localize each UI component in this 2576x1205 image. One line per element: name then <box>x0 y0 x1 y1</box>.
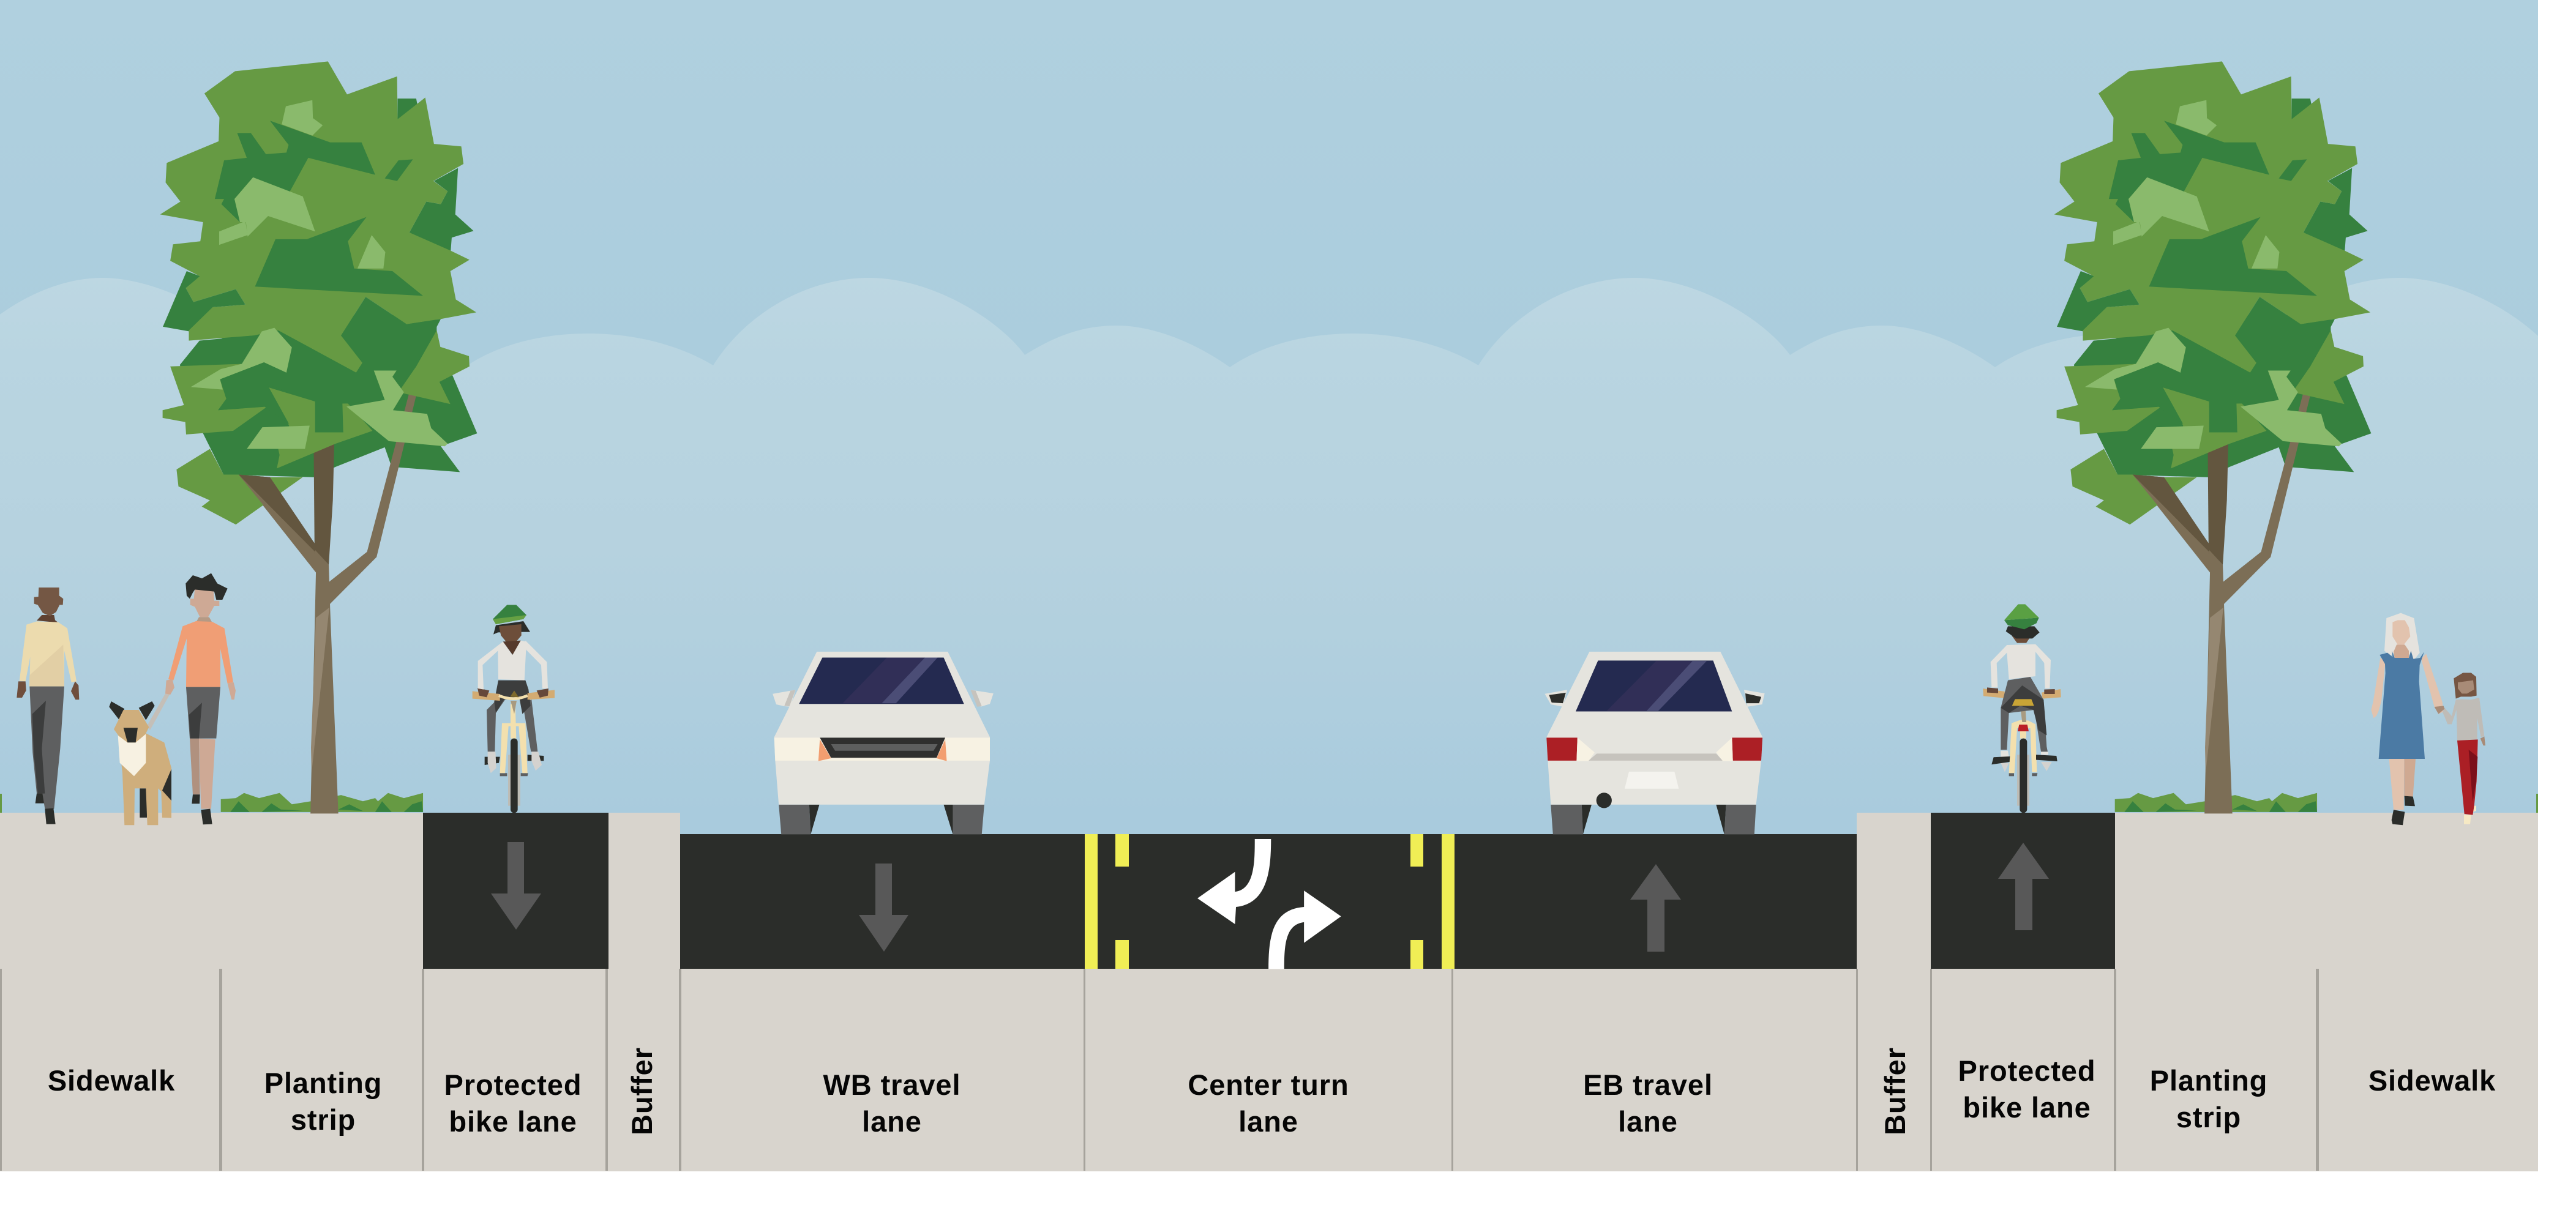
label: eastbound travel lane: lane <box>1618 1105 1678 1138</box>
cyclist facing viewer <box>473 605 555 813</box>
right tree with planting strip <box>2054 61 2371 813</box>
label: protected bike lane west: Protected <box>444 1069 582 1101</box>
label: planting strip east: Planting <box>2150 1064 2267 1097</box>
label: planting strip east: strip <box>2176 1101 2241 1133</box>
bike lane west <box>423 813 608 969</box>
label: protected bike lane east: bike lane <box>1963 1091 2091 1124</box>
label: planting strip west: Planting <box>264 1067 382 1099</box>
ground: sidewalks, planting strips and buffers <box>0 813 2538 1171</box>
label: buffer west: Buffer <box>626 1047 658 1135</box>
travel lanes pavement <box>680 834 1857 969</box>
label: westbound travel lane: WB travel <box>823 1069 960 1101</box>
label: westbound travel lane: lane <box>862 1105 922 1138</box>
sky with clouds <box>0 0 2555 857</box>
person in orange shirt <box>168 573 236 824</box>
rear-facing car <box>1544 652 1765 834</box>
man in cream sweater <box>17 588 79 824</box>
front-facing car <box>773 652 994 834</box>
label: planting strip west: strip <box>291 1103 356 1136</box>
arrow: east bike lane <box>1998 843 2049 930</box>
child <box>2435 673 2485 824</box>
label: center turn lane: Center turn <box>1188 1069 1349 1101</box>
label: protected bike lane west: bike lane <box>449 1105 577 1138</box>
label: sidewalk east: Sidewalk <box>2368 1064 2496 1097</box>
arrow: west bike lane <box>491 842 541 930</box>
label: eastbound travel lane: EB travel <box>1583 1069 1713 1101</box>
label: sidewalk west: Sidewalk <box>48 1064 175 1097</box>
label: center turn lane: lane <box>1238 1105 1298 1138</box>
lane dividers <box>0 969 2319 1171</box>
yellow lane markings <box>1085 834 1455 969</box>
woman <box>2371 613 2443 825</box>
edge grass <box>0 794 2538 813</box>
label: protected bike lane east: Protected <box>1958 1054 2095 1087</box>
left tree with planting strip <box>160 61 477 813</box>
arrow: westbound travel lane <box>859 864 908 952</box>
woman in blue dress holding child's hand <box>2371 613 2485 825</box>
dog <box>109 701 171 825</box>
icon: center turn lane arrows <box>1197 839 1341 969</box>
sky above the roadway <box>680 813 1857 834</box>
leash <box>147 690 173 730</box>
bike lane east <box>1931 813 2115 969</box>
pedestrian group: man, person and dog <box>17 573 236 825</box>
label: buffer east: Buffer <box>1879 1047 1911 1135</box>
cyclist seen from behind <box>1983 604 2061 813</box>
arrow: eastbound travel lane <box>1630 864 1681 952</box>
